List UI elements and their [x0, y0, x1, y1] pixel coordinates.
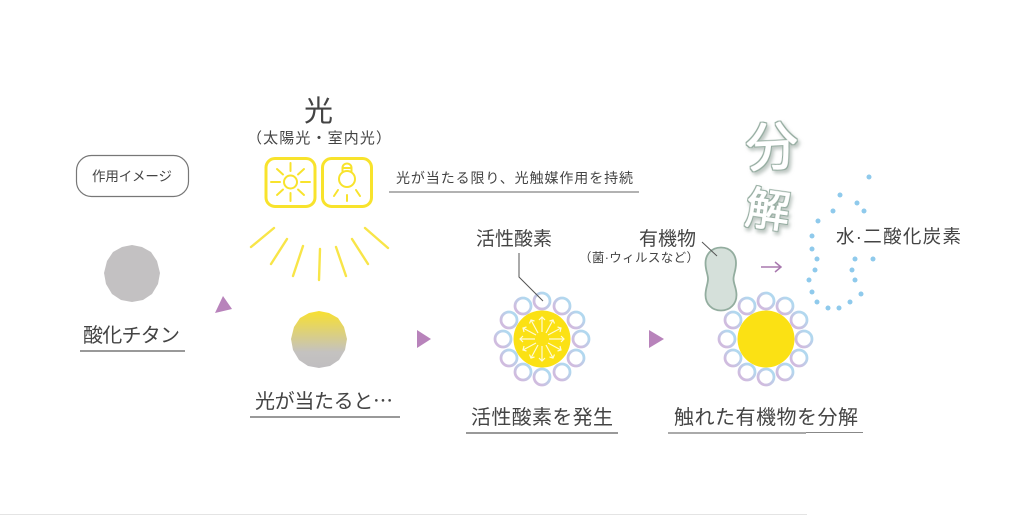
badge: 作用イメージ [76, 156, 188, 196]
step 2: exposed to light [250, 311, 400, 417]
leader line [519, 253, 543, 301]
label: 水・二酸化炭素: 水·二酸化炭素 [836, 226, 961, 247]
label: 光が当たると…: 光が当たると⋯ [255, 390, 393, 413]
arrow: step 3 to step 4 [649, 330, 664, 348]
radiating arrows [520, 317, 564, 361]
water and CO2 dots [806, 174, 876, 310]
step 3: active oxygen [466, 228, 618, 433]
icon: light bulb [322, 158, 372, 206]
label: 酸化チタン: 酸化チタン [83, 324, 180, 347]
light heading: 光 [304, 95, 333, 128]
heading: 分解 decorative text: 解 [743, 183, 793, 238]
light heading [247, 95, 391, 147]
step 1: titanium oxide [80, 245, 185, 351]
heading: 分解 decorative text: 分 [745, 118, 800, 179]
note: continuous effect: 光が当たる限り、光触媒作用を持続 [396, 170, 633, 186]
label: 有機物: 有機物 [639, 228, 696, 250]
icon: sun [266, 158, 315, 206]
organic matter blob [706, 248, 736, 310]
badge: 作用イメージ: 作用イメージ [92, 169, 172, 184]
yellow core [738, 310, 794, 368]
arrow: step 2 to step 3 [417, 330, 431, 348]
oxygen rings [719, 293, 812, 385]
label: 触れた有機物を分解: 触れた有機物を分解 [674, 406, 858, 429]
arrow: decomposition result [761, 262, 781, 272]
light rays [251, 228, 388, 280]
grey titanium oxide particle [104, 245, 160, 302]
gradient particle [291, 311, 347, 368]
leader line [702, 242, 717, 256]
yellow core [514, 310, 570, 368]
label: 活性酸素を発生: 活性酸素を発生 [471, 406, 613, 429]
oxygen rings [495, 293, 589, 385]
heading: 分解 decorative text [743, 118, 800, 238]
arrow: step 1 to step 2 [215, 296, 232, 313]
sublabel: bacteria and viruses: （菌·ウィルスなど） [579, 251, 699, 265]
label: 活性酸素: 活性酸素 [476, 228, 552, 250]
step 4: decomposition [579, 228, 863, 433]
light heading: （太陽光・室内光） [247, 130, 391, 147]
